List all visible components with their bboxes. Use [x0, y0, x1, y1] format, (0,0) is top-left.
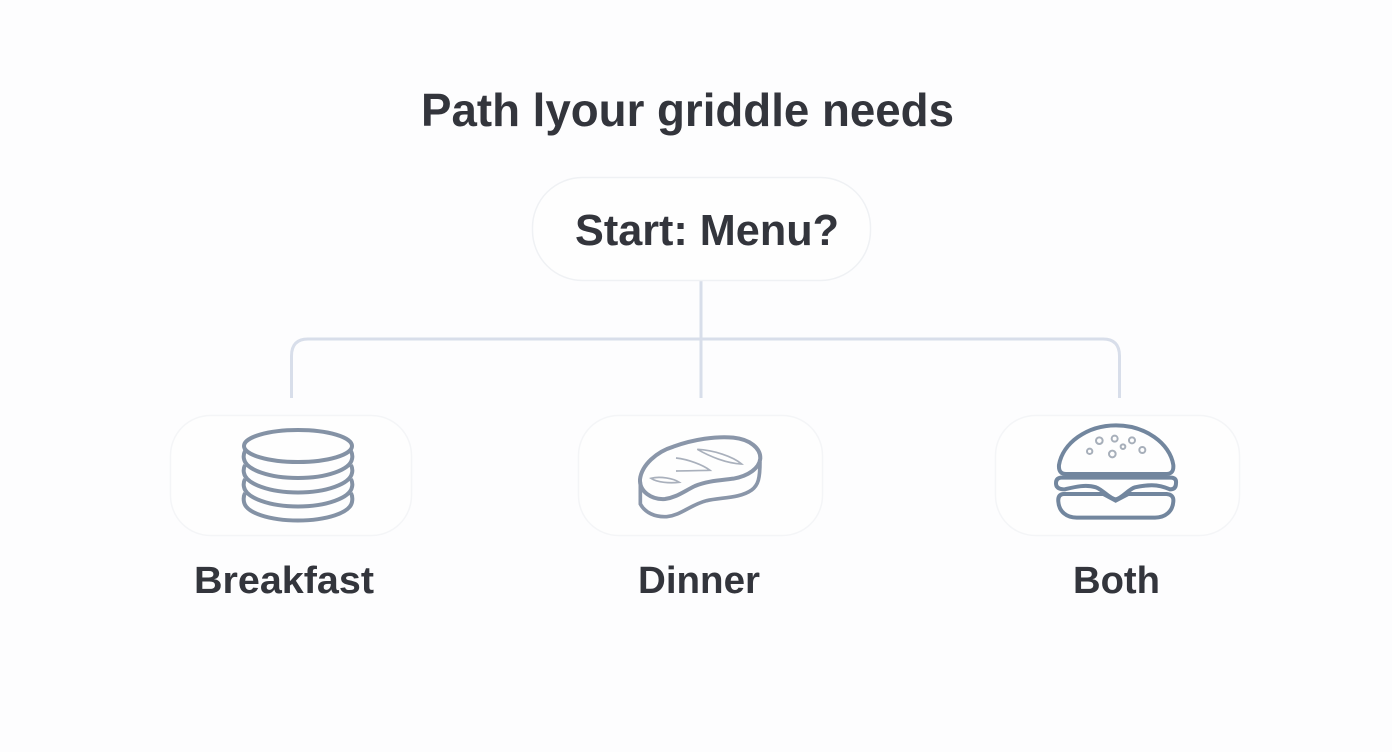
panel: both: [996, 416, 1240, 602]
icon: burger: [1056, 425, 1176, 518]
title: Path lyour griddle needs: [421, 84, 954, 136]
start node: [532, 178, 870, 280]
label: breakfast: Breakfast: [194, 560, 374, 602]
panel: dinner: [578, 416, 822, 602]
icon: steak: [640, 437, 760, 517]
icon: pancake stack: [244, 430, 352, 520]
start node: Start: Menu?: [575, 206, 839, 255]
connector lines: [292, 281, 1120, 398]
panel: breakfast: [170, 416, 412, 602]
label: dinner: Dinner: [638, 560, 760, 602]
label: both: Both: [1073, 560, 1160, 602]
